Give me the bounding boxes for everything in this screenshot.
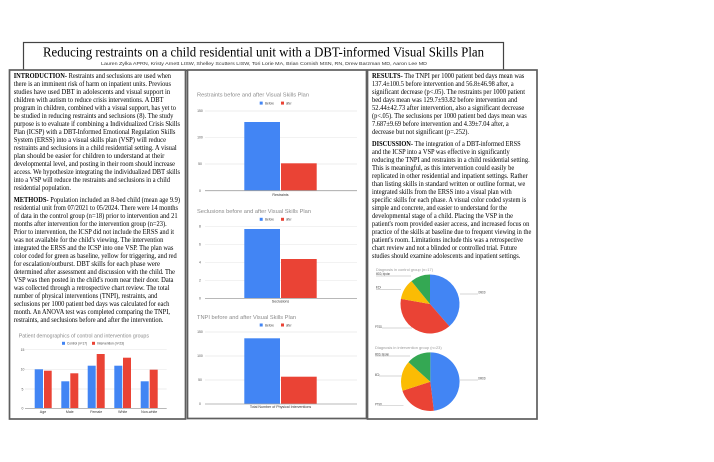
text block: introduction: access. We hypothesize integrating the individualized DBT skills [14, 167, 180, 176]
text block: discussion: reducing the TNPI and restraints in a child residential setting. [372, 155, 530, 164]
text block: introduction: residential population. [14, 183, 71, 192]
pie chart: diagnosis in intervention group: DMDD [478, 377, 486, 381]
text block: introduction: studies have used DBT in adolescents and visual support in [14, 87, 170, 96]
bar chart: seclusions: 6 [199, 242, 201, 246]
title banner [24, 42, 504, 70]
text block: methods: was collected through a retrospective chart review. The total [14, 283, 169, 292]
text block: introduction: System (ERSS) into a visual skills plan (VSP) will reduce [14, 135, 167, 144]
bar chart: patient demographics: Intervention (n=23) [97, 342, 124, 346]
pie chart: diagnosis in intervention group: PTSD [375, 403, 382, 407]
text block: introduction: restraints and seclusions in a child residential setting. A visual [14, 143, 177, 152]
pie chart: diagnosis in control group: Diagnosis in control group (n=17) [376, 268, 434, 272]
text block: discussion: patient's room. Limitations include this was a retrospective [372, 235, 524, 244]
text block: discussion: DISCUSSION- The integration of a DBT-informed ERSS [372, 139, 521, 148]
text block: methods: Prior to intervention, the ICSP did not include the ERSS and it [14, 227, 175, 236]
text block: methods: number of physical interventions (TNPI), restraints, and [14, 291, 158, 300]
bar chart: TNPI: after [286, 323, 292, 327]
panel: results and discussion [368, 70, 537, 419]
bar chart: patient demographics: Female [90, 410, 102, 414]
text block: introduction: INTRODUCTION- Restraints and seclusions are used when [14, 71, 171, 80]
text block: methods [14, 195, 180, 324]
bar chart: restraints: after [286, 101, 292, 105]
pie chart: diagnosis in control group: PTSD [375, 325, 382, 329]
text block: discussion: developmental stage of a child. Placing the VSP in the [372, 211, 514, 220]
bar chart: patient demographics: 10 [21, 368, 24, 372]
text block: methods: VSP was then posted in the child's room near their door. Data [14, 275, 174, 284]
bar chart: seclusions [197, 209, 357, 304]
pie chart: diagnosis in intervention group: MDD, bipolar [375, 352, 390, 356]
bar chart: seclusions: after [286, 218, 292, 222]
text block: methods: for escalation/outburst. DBT skills for each phase were [14, 259, 161, 268]
text block: introduction: there is an imminent risk of harm on inpatient units. Previous [14, 79, 171, 88]
text block: results [372, 71, 527, 136]
pie chart: diagnosis in control group: MDD, bipolar [376, 272, 391, 276]
title: Reducing restraints on a child residential unit with a DBT-informed Visual Skills Plan [43, 44, 484, 60]
pie chart: diagnosis in intervention group: ID [375, 373, 380, 377]
bar chart: TNPI: 0 [199, 402, 201, 406]
bar chart: restraints: Restraints [272, 193, 289, 197]
authors: Lauren Zylka APRN, Kristy Arnett LISW, Shelley Scutters LISW, Tori Lorie MA, Brian Cornish MSN, RN, Drew Barzman MD, Aaron Lee MD [101, 61, 428, 67]
text block: discussion: This is meaningful, as this intervention could easily be [372, 163, 515, 172]
pie chart: diagnosis in intervention group: Diagnosis in intervention group (n=23) [375, 346, 442, 350]
text block: results: 137.4±100.5 before intervention and 56.8±46.98 after, a [372, 79, 514, 88]
text block: discussion: chart review and not a blinded or controlled trial. Future [372, 243, 518, 252]
text block: introduction: program in children, combined with a visual support, has yet to [14, 103, 176, 112]
text block: methods: color coded for green as baseline, yellow for triggering, and red [14, 251, 177, 260]
text block: discussion: replicated in other residential and inpatient settings. Rather [372, 171, 528, 180]
bar chart: seclusions: Seclusions before and after Visual Skills Plan [197, 209, 311, 215]
text block: methods: seclusions per 1000 patient bed days was calculated for each [14, 299, 170, 308]
bar chart: TNPI: Total Number of Physical Interventions [250, 405, 311, 409]
bar chart: TNPI [197, 315, 357, 409]
text block: introduction: developmental level, and posting in their room should increase [14, 159, 176, 168]
bar chart: restraints: 50 [198, 162, 202, 166]
text block: discussion: simple and concrete, and easier to understand for the [372, 203, 508, 212]
bar chart: patient demographics: White [118, 410, 127, 414]
bar chart: patient demographics: 15 [21, 348, 24, 352]
text block: methods: of data in the control group (n=18) prior to intervention and 21 [14, 211, 178, 220]
bar chart: TNPI: 50 [198, 378, 202, 382]
text block: introduction: into a VSP will reduce the restraints and seclusions in a child [14, 175, 170, 184]
text block: methods: determined after assessment and discussion with the child. The [14, 267, 176, 276]
pie chart: diagnosis in control group: ID [376, 286, 382, 290]
text block: results: significant decrease (p<.05). The restraints per 1000 patient [372, 87, 526, 96]
bar chart: restraints: 100 [197, 136, 203, 140]
bar chart: restraints: 150 [197, 109, 203, 113]
pie chart: diagnosis in control group [375, 268, 486, 334]
text block: results: 7.687±9.69 before intervention and 4.39±7.04 after, a [372, 119, 509, 128]
bar chart: patient demographics: 0 [22, 407, 24, 411]
text block: discussion: patient's room provided easier access, and increased focus on [372, 219, 530, 228]
bar chart: seclusions: Seclusions [272, 300, 289, 304]
bar chart: seclusions: 4 [199, 260, 201, 264]
bar chart: patient demographics [19, 334, 167, 414]
bar chart: patient demographics: 5 [22, 387, 24, 391]
text block: methods: residential unit from 07/2021 to 05/2024. There were 14 months [14, 203, 178, 212]
text block: discussion: specific skills for each phase. A visual color coded system is [372, 195, 526, 204]
text block: methods: restraints, and seclusions before and after the intervention. [14, 315, 164, 324]
bar chart: TNPI: 100 [197, 354, 203, 358]
text block: methods: integrated the ERSS and the ICSP into one VSP. The plan was [14, 243, 173, 252]
text block: methods: month. An ANOVA test was completed comparing the TNPI, [14, 307, 170, 316]
text block: results: (p<.05). The seclusions per 1000 patient bed days mean was [372, 111, 527, 120]
bar chart: seclusions: 2 [199, 278, 201, 282]
text block: results: RESULTS- The TNPI per 1000 patient bed days mean was [372, 71, 524, 80]
text block: discussion: than listing skills in standard written or outline format, we [372, 179, 526, 188]
text block: introduction: plan should be easier for children to understand at their [14, 151, 165, 160]
panel: bar charts [188, 70, 366, 418]
bar chart: seclusions: Before [265, 218, 274, 222]
bar chart: seclusions: 0 [199, 296, 201, 300]
bar chart: restraints [197, 92, 357, 197]
text block: introduction: purpose is to evaluate if combining a Individualized Crisis Skills [14, 119, 180, 128]
bar chart: patient demographics: Non-white [141, 410, 157, 414]
panel: introduction and methods [10, 70, 186, 419]
bar chart: patient demographics: Male [66, 410, 74, 414]
pie chart: diagnosis in intervention group [375, 346, 486, 411]
bar chart: TNPI: Before [265, 323, 274, 327]
text block: introduction [14, 71, 180, 192]
text block: discussion: studies should examine adolescents and inpatient settings. [372, 251, 520, 260]
text block: introduction: Plan (ICSP) with a DBT-Informed Emotional Regulation Skills [14, 127, 176, 136]
text block: discussion: practice of the skills at baseline due to frequent viewing in the [372, 227, 532, 236]
bar chart: restraints: Before [265, 101, 274, 105]
text block: discussion: integrated skills from the ERSS into a visual plan with [372, 187, 512, 196]
text block: introduction: children with autism to reduce crisis interventions. A DBT [14, 95, 164, 104]
text block: methods: was not available for the child's viewing. The intervention [14, 235, 164, 244]
bar chart: TNPI: 150 [197, 330, 203, 334]
text block: introduction: be studied in reducing restraints and seclusions (8). The study [14, 111, 174, 120]
bar chart: restraints: Restraints before and after Visual Skills Plan [197, 92, 309, 98]
text block: discussion: and the ICSP into a VSP was effective in significantly [372, 147, 510, 156]
text block: results: bed days mean was 129.7±93.82 before intervention and [372, 95, 518, 104]
bar chart: patient demographics: Age [40, 410, 46, 414]
text block: methods: METHODS- Population included an 8-bed child (mean age 9.9) [14, 195, 180, 204]
bar chart: patient demographics: Control (n=17) [67, 342, 87, 346]
text block: results: decrease but not significant (p=.252). [372, 127, 469, 136]
bar chart: seclusions: 8 [199, 224, 201, 228]
text block: discussion [372, 139, 532, 260]
bar chart: restraints: 0 [199, 189, 201, 193]
bar chart: patient demographics: Patient demographics of control and intervention groups [19, 334, 149, 340]
bar chart: TNPI: TNPI before and after Visual Skills Plan [197, 315, 296, 321]
pie chart: diagnosis in control group: DMDD [478, 291, 486, 295]
text block: results: 52.44±42.73 after intervention, also a significant decrease [372, 103, 525, 112]
text block: methods: months after intervention for the intervention group (n=23). [14, 219, 167, 228]
